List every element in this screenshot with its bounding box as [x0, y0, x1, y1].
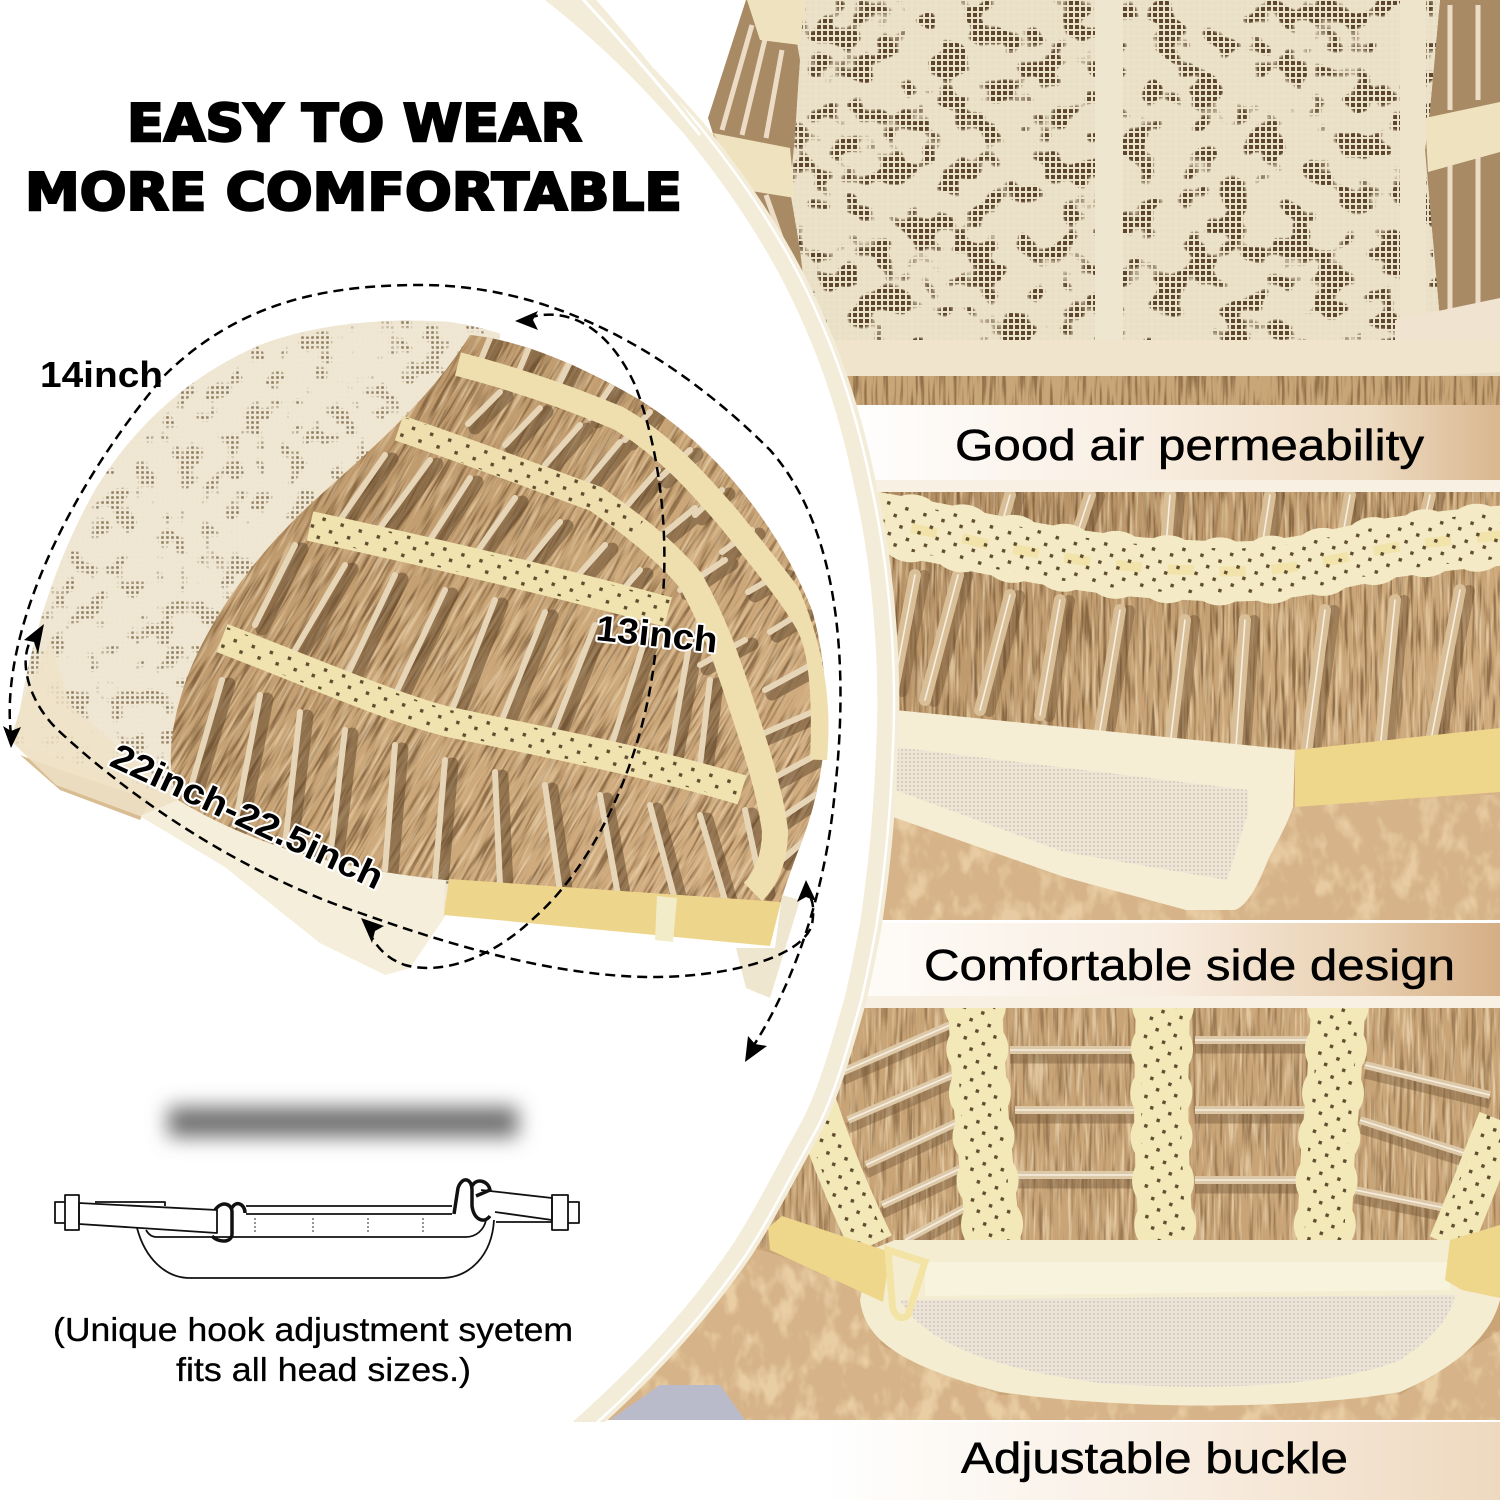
wig cap illustration	[13, 320, 829, 998]
cup outline	[137, 1220, 494, 1278]
crown ribbons	[713, 0, 1500, 198]
lace mesh	[791, 0, 1440, 340]
photo: side design close-up	[860, 492, 1500, 920]
vertical hair seams	[893, 495, 1469, 761]
cap bottom band	[830, 340, 1500, 378]
lower wavy hair	[600, 1245, 1500, 1420]
perforated ribbons	[222, 428, 775, 892]
photo: lace crown close-up	[700, 0, 1500, 406]
left strap	[79, 1202, 217, 1233]
banner: good air permeability: Good air permeability	[955, 421, 1424, 470]
label: 22inch-22.5inch: 22inch-22.5inch	[105, 735, 390, 897]
right hook	[454, 1180, 490, 1220]
hair strips at the lace edges	[708, 0, 1500, 311]
caption: (Unique hook adjustment syetem	[53, 1311, 573, 1348]
title: EASY TO WEAR	[127, 94, 582, 154]
stitch marks	[255, 1218, 423, 1232]
side lace tab	[1395, 298, 1500, 340]
ear-side lace patch	[893, 710, 1295, 910]
hook adjustment diagram	[55, 1180, 579, 1278]
hair weft area	[170, 335, 824, 903]
left hook	[212, 1204, 245, 1241]
right strap ends	[552, 1195, 579, 1230]
floating shadow	[168, 1107, 518, 1137]
cream band repeat over lace	[12, 640, 178, 816]
wavy hair below patch	[875, 792, 1500, 920]
buckle patch	[860, 1240, 1500, 1406]
left strap ends	[55, 1195, 79, 1230]
banner: adjustable buckle	[0, 1422, 1500, 1500]
hair peek left	[20, 755, 150, 820]
banner: comfortable side design: Comfortable side design	[924, 941, 1455, 990]
hair row under band	[835, 376, 1500, 406]
upper bars	[246, 1206, 452, 1214]
lace ribbon	[860, 519, 1500, 572]
caption: fits all head sizes.)	[176, 1351, 471, 1388]
grey backdrop corner	[610, 1385, 745, 1420]
banner: good air permeability	[840, 405, 1500, 492]
yellow strap left	[768, 1216, 890, 1302]
cross seams	[842, 1025, 1490, 1248]
caption	[53, 1311, 573, 1388]
banner: adjustable buckle background under arc	[600, 1420, 1500, 1422]
weft seams	[190, 338, 835, 904]
right cap tab	[736, 895, 800, 998]
strap tab	[655, 896, 677, 942]
banner: adjustable buckle: Adjustable buckle	[961, 1434, 1348, 1483]
plain ribbons	[399, 364, 823, 892]
dashed measurement arrow: 13 inch	[361, 311, 664, 968]
decorative arc band	[0, 0, 877, 1500]
label: 13inch: 13inch	[594, 607, 720, 661]
plastic buckle left	[888, 1250, 925, 1318]
vertical lace ribbons	[815, 1005, 1500, 1255]
title	[25, 94, 682, 223]
dashed measurement arrow: 22 inch	[24, 624, 816, 977]
buckle right	[1445, 1225, 1500, 1298]
label: 14inch: 14inch	[40, 354, 163, 395]
title: MORE COMFORTABLE	[25, 163, 682, 223]
banner: comfortable side design	[840, 923, 1500, 1008]
yellow strap	[1295, 728, 1500, 807]
lower left cap band	[11, 688, 455, 969]
right strap	[481, 1190, 552, 1222]
photo: adjustable buckle close-up	[600, 1005, 1500, 1420]
inner band	[146, 1220, 486, 1237]
light patch under label	[160, 800, 445, 975]
dashed measurement arrow: 14 inch	[3, 285, 840, 1062]
lace crown	[0, 300, 500, 900]
yellow strap	[444, 879, 781, 946]
